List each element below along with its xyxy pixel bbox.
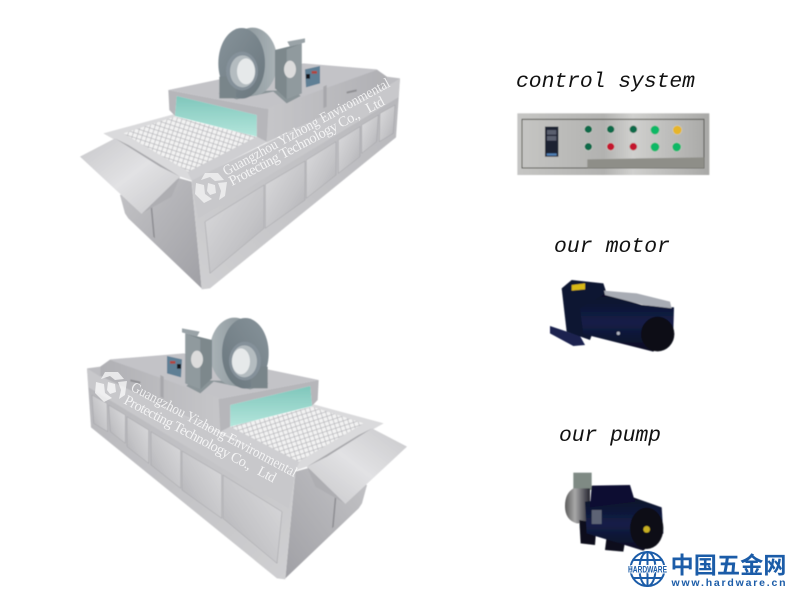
underside frame: [120, 178, 202, 288]
side door panels: [205, 105, 395, 273]
pump inlet: [573, 473, 592, 490]
machine: conveyor dryer, feed on right: [87, 318, 407, 579]
terminal box: [604, 291, 672, 308]
gearbox: [562, 280, 607, 340]
globe icon: [630, 552, 664, 586]
pump motor: [585, 497, 663, 551]
pump photo: [565, 473, 663, 552]
logo: hardware.cn: [628, 552, 786, 589]
white mesh conveyor belt: [103, 114, 267, 181]
digital temperature display: [545, 127, 558, 157]
white mesh conveyor belt: [220, 404, 384, 471]
side body: [192, 78, 400, 289]
side door panels: [92, 395, 282, 563]
motor body: [580, 293, 674, 352]
stainless panel plate: [517, 113, 709, 175]
small control box: [305, 66, 320, 87]
motor foot: [550, 326, 585, 346]
motor photo: [550, 280, 674, 352]
drying hood housing: [168, 63, 400, 143]
site URL: www.hardware.cn: [670, 577, 786, 589]
side body: [87, 368, 295, 579]
watermark logo, lower machine: [95, 372, 127, 402]
nameplate: [592, 510, 602, 524]
Chinese site name: 中国五金网: [670, 552, 786, 578]
teal hood opening: [230, 386, 312, 427]
drying hood housing: [87, 353, 319, 433]
heading: our pump: our pump: [559, 424, 661, 448]
watermark text, lower machine: Guangzhou Yizhong Environmental: [128, 379, 300, 481]
machine: conveyor dryer, feed on left: [80, 28, 400, 289]
indicator buttons: [584, 125, 682, 152]
watermark logo, upper machine: [195, 173, 227, 203]
pump volute: [565, 488, 590, 523]
feed hopper tray: [80, 138, 180, 214]
watermark text, upper machine: Guangzhou Yizhong Environmental: [220, 75, 393, 180]
blower fan with bracket: [218, 28, 305, 103]
control panel: [517, 113, 709, 175]
feed hopper tray: [307, 428, 407, 504]
HARDWARE globe label: HARDWARE: [628, 564, 667, 574]
watermark text, upper machine: Protecting Technology Co., Ltd: [226, 93, 388, 190]
pump feet: [579, 520, 625, 552]
underside frame: [285, 468, 367, 578]
end cap: [641, 317, 674, 351]
fan cover: [630, 508, 663, 549]
small control box: [167, 356, 182, 377]
heading: our motor: our motor: [554, 235, 670, 259]
watermark text, lower machine: Protecting Technology Co., Ltd: [121, 392, 279, 487]
blower fan with bracket: [182, 318, 269, 393]
teal hood opening: [175, 96, 257, 137]
heading: control system: control system: [516, 70, 695, 94]
yellow label: [572, 283, 585, 291]
